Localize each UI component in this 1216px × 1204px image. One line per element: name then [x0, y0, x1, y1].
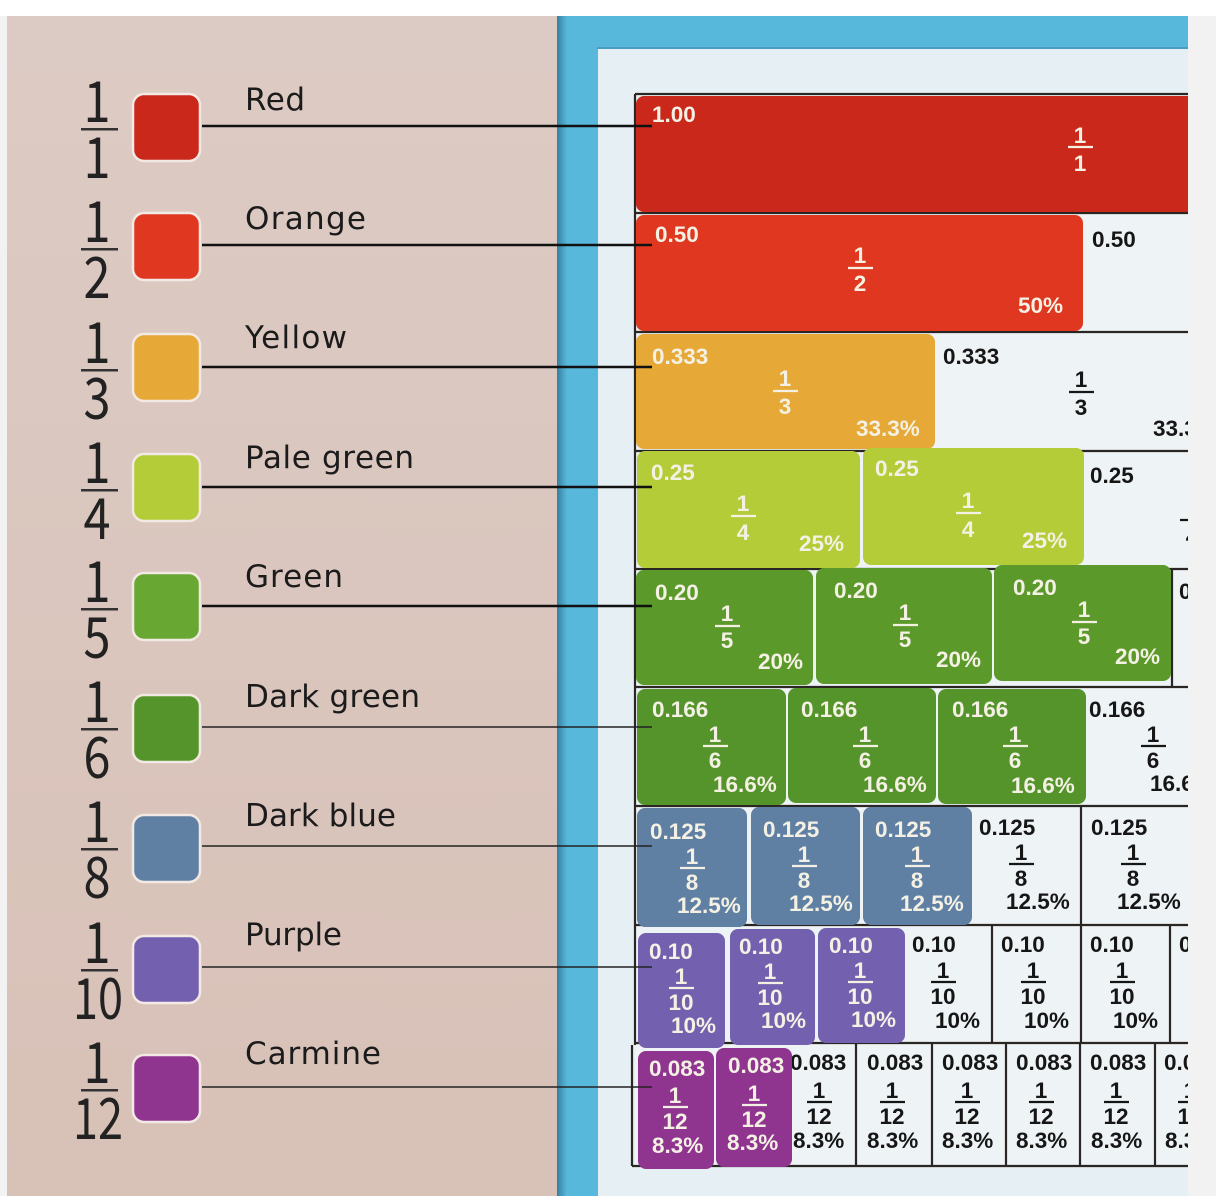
legend: 1/5 green — [81, 537, 652, 675]
cell: 1/12 empty 3: 12 — [954, 1104, 980, 1129]
legend: 1/8 dark blue: 8 — [84, 833, 110, 915]
cell: 1/8 empty 2 — [1092, 820, 1180, 909]
row: 1/12 carmine block 2: 8.3% — [727, 1130, 778, 1155]
cell: 1/12 empty 2: 8.3% — [867, 1128, 918, 1153]
legend: 1/6 dark green: Dark green — [245, 679, 420, 715]
cell: 1/4 empty: 1 — [1190, 495, 1202, 520]
row: 1/4 pale green block 1: 4 — [737, 520, 750, 545]
legend: 1/10 purple: 10 — [73, 954, 123, 1036]
row: 1/12 carmine block 2: 12 — [741, 1107, 767, 1132]
panel: blue board frame — [557, 16, 1188, 1196]
row: 1/8 dark blue block 1: 8 — [686, 870, 698, 895]
row: 1/10 purple block 1: 10 — [668, 990, 694, 1015]
legend: 1/2 orange: 1 — [84, 177, 110, 259]
row: 1/6 dark green block 2: 1 — [859, 722, 871, 747]
cell: 1/3 empty: 1 — [1075, 367, 1087, 392]
legend: 1/12 carmine: Carmine — [245, 1036, 381, 1072]
cell: 1/4 empty — [1090, 468, 1188, 541]
row: 1/8 dark blue block 1 — [637, 808, 747, 927]
legend: 1/3 yellow — [81, 298, 652, 436]
row: 1/6 dark green block 2: 0.166 — [801, 697, 857, 722]
legend: 1/1 red: 1 — [84, 113, 110, 195]
row: 1/10 purple block 1 — [638, 933, 725, 1048]
row: 1/6 dark green block 1: 1 — [709, 722, 721, 747]
cell: 1/12 empty 3: 0.083 — [942, 1050, 998, 1075]
cell: 1/12 empty 5 — [1090, 1054, 1146, 1148]
cell: 1/10 empty 3: 10% — [1113, 1008, 1158, 1033]
row: 1/6 dark green block 2: 16.6% — [863, 772, 927, 797]
cell: 1/12 empty 2 — [868, 1054, 922, 1148]
row: 1/12 carmine block 2: 0.083 — [728, 1053, 784, 1078]
panel: white fraction chart sheet — [598, 49, 1188, 1196]
cell: 1/12 empty 2: 1 — [886, 1078, 898, 1103]
row: 1/3 yellow block — [636, 334, 935, 449]
cell: 1/12 empty 3: 8.3% — [942, 1128, 993, 1153]
legend: 1/2 orange: Orange — [245, 201, 366, 237]
legend: 1/5 green: 5 — [84, 593, 110, 675]
cell: 1/8 empty 2: 1 — [1127, 840, 1139, 865]
row: 1/2 orange block: 0.50 — [655, 222, 699, 247]
cell: 1/10 empty 3: 0.10 — [1090, 932, 1134, 957]
row: 1/5 green block 2 — [816, 568, 992, 684]
row: 1/6 dark green block 1: 16.6% — [713, 772, 777, 797]
row: 1/10 purple block 3: 1 — [854, 958, 866, 983]
cell: 1/8 empty 2: 12.5% — [1117, 889, 1181, 914]
cell: 1/12 empty 5: 12 — [1103, 1104, 1129, 1129]
row: 1/3 yellow block: 3 — [779, 394, 791, 419]
legend: 1/4 pale green: 4 — [84, 474, 110, 556]
cell: 1/12 empty 1: 8.3% — [793, 1128, 844, 1153]
row: 1/12 carmine block 2 — [716, 1048, 792, 1167]
row: 1/5 green block 1: 5 — [721, 628, 733, 653]
row: 1/6 dark green block 3: 6 — [1009, 748, 1021, 773]
row: 1/3 yellow block: 0.333 — [652, 344, 708, 369]
row: 1/5 green block 3 — [994, 565, 1171, 681]
cell: 1/3 empty: 3 — [1075, 395, 1087, 420]
row: 1/10 purple block 3: 10% — [851, 1007, 896, 1032]
cell: 1/10 empty 2: 10 — [1020, 984, 1046, 1009]
legend: 1/3 yellow: 1 — [84, 298, 110, 380]
cell: 1/12 empty 1: 1 — [813, 1078, 825, 1103]
cell: 1/3 empty: 0.333 — [943, 344, 999, 369]
row: 1/2 orange block: 50% — [1018, 293, 1063, 318]
legend: 1/1 red — [81, 57, 652, 195]
row: 1/4 pale green block 2: 25% — [1022, 528, 1067, 553]
cell: 1/6 empty: 1 — [1147, 722, 1159, 747]
cell: 1/12 empty 2: 12 — [879, 1104, 905, 1129]
row: 1/1 red block — [636, 96, 1196, 212]
row: 1/10 purple block 1: 0.10 — [649, 939, 693, 964]
row: 1/8 dark blue block 2: 12.5% — [789, 891, 853, 916]
cell: 1/8 empty 1: 8 — [1015, 866, 1027, 891]
row: 1/3 yellow block: 33.3% — [856, 416, 920, 441]
cell: 1/12 empty 6: 1 — [1184, 1078, 1196, 1103]
row: 1/8 dark blue block 3: 12.5% — [900, 891, 964, 916]
cell: 1/12 empty 6: 12 — [1177, 1104, 1203, 1129]
row: 1/5 green block 2: 20% — [936, 647, 981, 672]
row: 1/12 carmine block 1: 0.083 — [649, 1056, 705, 1081]
cell: 1/4 empty: 0.25 — [1090, 463, 1134, 488]
legend: 1/1 red: 1 — [84, 57, 110, 139]
row: 1/3 yellow block: 1 — [779, 366, 791, 391]
row: 1/10 purple block 2 — [730, 929, 815, 1045]
legend: 1/6 dark green: 6 — [84, 713, 110, 795]
row: 1/5 green block 1: 20% — [758, 649, 803, 674]
legend: 1/12 carmine: 1 — [84, 1018, 110, 1100]
row: 1/6 dark green block 3: 1 — [1009, 722, 1021, 747]
row: 1/8 dark blue block 2: 0.125 — [763, 817, 819, 842]
row: 1/2 orange block: 1 — [854, 243, 866, 268]
legend: 1/12 carmine: 12 — [73, 1074, 123, 1156]
row: 1/2 orange block — [636, 215, 1083, 331]
cell: 1/10 empty 3 — [1090, 936, 1158, 1028]
row: 1/4 pale green block 1: 0.25 — [651, 460, 695, 485]
cell: 1/10 empty 3: 10 — [1109, 984, 1135, 1009]
row: 1/12 carmine block 1: 8.3% — [652, 1133, 703, 1158]
row: 1/5 green block 2: 5 — [899, 627, 911, 652]
row: 1/10 purple block 1: 10% — [671, 1013, 716, 1038]
cell: 1/12 empty 3: 1 — [961, 1078, 973, 1103]
cell: 1/10 empty 1: 10 — [930, 984, 956, 1009]
legend: 1/3 yellow: Yellow — [244, 320, 347, 356]
cell: 1/12 empty 4: 8.3% — [1016, 1128, 1067, 1153]
cell: 1/10 empty 1 — [912, 936, 980, 1028]
row: 1/8 dark blue block 3 — [863, 807, 972, 925]
cell: 1/8 empty 2: 8 — [1127, 866, 1139, 891]
cell: 1/10 empty 2: 10% — [1024, 1008, 1069, 1033]
panel: legend background — [7, 16, 557, 1196]
row: 1/8 dark blue block 3: 0.125 — [875, 817, 931, 842]
cell: 1/6 empty: 16.6% — [1150, 771, 1214, 796]
cell: 1/12 empty 4: 0.083 — [1016, 1050, 1072, 1075]
cell: 1/12 empty 6 — [1164, 1054, 1188, 1148]
cell: 1/12 empty 6: 8.3% — [1165, 1128, 1216, 1153]
row: 1/4 pale green block 1: 25% — [799, 531, 844, 556]
row: 1/8 dark blue block 2: 8 — [798, 868, 810, 893]
cell: 1/6 empty — [1090, 702, 1188, 791]
row: 1/5 green block 1: 0.20 — [655, 580, 699, 605]
legend: 1/3 yellow: 3 — [84, 354, 110, 436]
row: 1/8 dark blue block 3: 8 — [911, 868, 923, 893]
cell: 1/8 empty 1: 12.5% — [1006, 889, 1070, 914]
cell: 1/12 empty 5: 0.083 — [1090, 1050, 1146, 1075]
cell: 1/3 empty — [944, 348, 1188, 436]
row: 1/1 red block: 1 — [1074, 123, 1086, 148]
cell: 1/2 empty: 0.50 — [1092, 227, 1136, 252]
legend: 1/8 dark blue: 1 — [84, 777, 110, 859]
row: 1/10 purple block 2: 1 — [764, 959, 776, 984]
row: 1/4 pale green block 2 — [863, 448, 1084, 565]
legend: 1/4 pale green: 1 — [84, 418, 110, 500]
cell: 1/10 empty 1: 10% — [935, 1008, 980, 1033]
row: 1/5 green block 2: 0.20 — [834, 578, 878, 603]
legend: 1/10 purple — [73, 898, 652, 1036]
cell: 1/8 empty 1: 0.125 — [979, 815, 1035, 840]
row: 1/10 purple block 1: 1 — [675, 964, 687, 989]
legend: 1/4 pale green: Pale green — [245, 440, 414, 476]
cell: 1/12 empty 1: 12 — [806, 1104, 832, 1129]
legend: 1/8 dark blue — [81, 777, 652, 915]
row: 1/6 dark green block 3 — [938, 689, 1086, 804]
row: 1/5 green block 3: 0.20 — [1013, 575, 1057, 600]
row: 1/12 carmine block 2: 1 — [748, 1081, 760, 1106]
legend: 1/12 carmine — [73, 1018, 652, 1156]
row: 1/12 carmine block 1: 1 — [669, 1083, 681, 1108]
cell: 1/3 empty: 33.3% — [1153, 416, 1216, 441]
legend: 1/8 dark blue: Dark blue — [245, 798, 396, 834]
row: 1/12 carmine block 1 — [638, 1051, 714, 1169]
row: 1/4 pale green block 2: 1 — [962, 488, 974, 513]
row: 1/10 purple block 2: 10 — [757, 985, 783, 1010]
legend: 1/6 dark green: 1 — [84, 657, 110, 739]
row: 1/10 purple block 3 — [818, 928, 905, 1043]
cell: 1/10 empty 1: 0.10 — [912, 932, 956, 957]
cell: 1/12 empty 4: 12 — [1028, 1104, 1054, 1129]
legend: 1/1 red: Red — [245, 82, 305, 118]
row: 1/5 green block 2: 1 — [899, 600, 911, 625]
cell: 1/10 empty 2 — [1002, 936, 1068, 1028]
cell: 1/4 empty: 4 — [1186, 524, 1199, 549]
row: 1/5 green block 3: 1 — [1078, 597, 1090, 622]
legend: 1/2 orange: 2 — [84, 233, 110, 315]
row: 1/4 pale green block 1: 1 — [737, 491, 749, 516]
row: 1/6 dark green block 1: 0.166 — [652, 697, 708, 722]
row: 1/5 green block 3: 20% — [1115, 644, 1160, 669]
row: 1/1 red block: 1.00 — [652, 102, 696, 127]
row: 1/6 dark green block 3: 0.166 — [952, 697, 1008, 722]
row: 1/10 purple block 3: 10 — [847, 984, 873, 1009]
row: 1/10 purple block 3: 0.10 — [829, 933, 873, 958]
cell: 1/6 empty: 0.166 — [1089, 697, 1145, 722]
cell: 1/12 empty 1 — [792, 1054, 846, 1148]
row: 1/6 dark green block 2: 6 — [859, 748, 871, 773]
cell: 1/6 empty: 6 — [1147, 748, 1159, 773]
chart: fraction wall — [632, 94, 1216, 1169]
legend: 1/10 purple: Purple — [245, 917, 342, 953]
legend: 1/5 green: Green — [245, 559, 343, 595]
row: 1/6 dark green block 1 — [637, 689, 786, 805]
legend: 1/5 green: 1 — [84, 537, 110, 619]
row: 1/2 orange block: 2 — [854, 271, 866, 296]
cell: 1/12 empty 2: 0.083 — [867, 1050, 923, 1075]
row: 1/10 purple block 2: 10% — [761, 1008, 806, 1033]
row: 1/5 green block 1: 1 — [721, 601, 733, 626]
cell: 1/12 empty 4: 1 — [1035, 1078, 1047, 1103]
cell: 1/8 empty 1: 1 — [1015, 840, 1027, 865]
row: 1/4 pale green block 1 — [637, 451, 860, 568]
legend: 1/2 orange — [81, 177, 652, 315]
row: 1/5 green block 1 — [636, 570, 813, 685]
cell: 1/10 empty 2: 0.10 — [1001, 932, 1045, 957]
row: 1/5 green block 3: 5 — [1078, 624, 1090, 649]
cell: 1/12 empty 3 — [942, 1054, 998, 1148]
cell: 1/8 empty 1 — [980, 820, 1070, 909]
row: 1/6 dark green block 3: 16.6% — [1011, 773, 1075, 798]
legend: 1/6 dark green — [81, 657, 652, 795]
row: 1/6 dark green block 1: 6 — [709, 748, 721, 773]
row: 1/8 dark blue block 3: 1 — [911, 842, 923, 867]
row: 1/8 dark blue block 2 — [751, 807, 860, 925]
cell: 1/10 empty 1: 1 — [937, 958, 949, 983]
row: 1/8 dark blue block 1: 12.5% — [677, 893, 741, 918]
cell: 1/12 empty 1: 0.083 — [790, 1050, 846, 1075]
row: 1/4 pale green block 2: 0.25 — [875, 456, 919, 481]
cell: 1/10 empty 3: 1 — [1116, 958, 1128, 983]
cell: 1/10 empty 2: 1 — [1027, 958, 1039, 983]
row: 1/12 carmine block 1: 12 — [662, 1109, 688, 1134]
cell: 1/8 empty 2: 0.125 — [1091, 815, 1147, 840]
row: 1/6 dark green block 2 — [788, 688, 936, 803]
row: 1/10 purple block 2: 0.10 — [739, 934, 783, 959]
row: 1/8 dark blue block 1: 0.125 — [650, 819, 706, 844]
legend: 1/10 purple: 1 — [84, 898, 110, 980]
row: 1/8 dark blue block 2: 1 — [798, 842, 810, 867]
row: 1/4 pale green block 2: 4 — [962, 517, 975, 542]
cell: 1/12 empty 5: 1 — [1110, 1078, 1122, 1103]
row: 1/1 red block: 1 — [1074, 151, 1086, 176]
cell: 1/12 empty 5: 8.3% — [1091, 1128, 1142, 1153]
legend: 1/4 pale green — [81, 418, 652, 556]
row: 1/8 dark blue block 1: 1 — [686, 844, 698, 869]
cell: 1/12 empty 4 — [1016, 1054, 1072, 1148]
